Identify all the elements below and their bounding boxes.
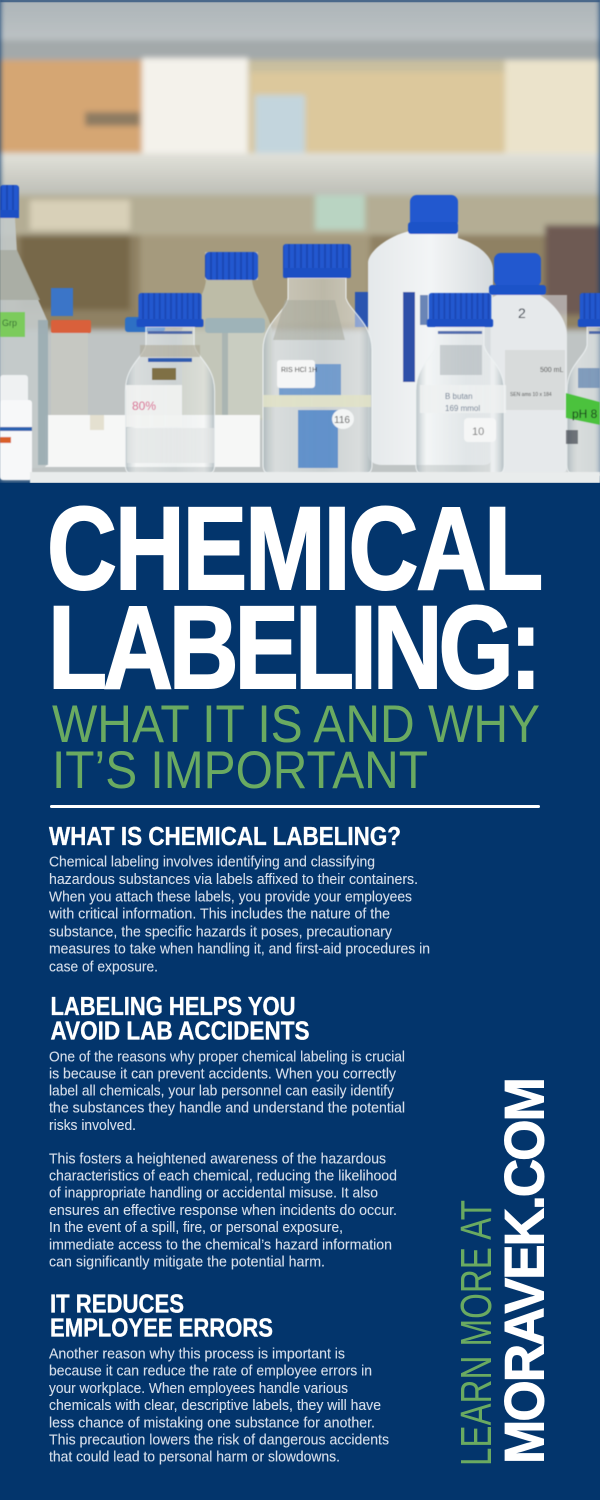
body text, second paragraph: This fosters a heightened awareness of the hazardous <box>49 1150 386 1167</box>
shelf back items <box>45 252 369 467</box>
section: what is chemical labeling <box>48 821 430 976</box>
body text, second paragraph: immediate access to the chemical’s hazard information <box>49 1236 392 1253</box>
body text <box>49 1345 389 1466</box>
title <box>47 482 541 713</box>
glass bottle, front left: 80% <box>132 399 156 413</box>
glass bottle, front right: 169 mmol <box>445 404 480 413</box>
body text: Chemical labeling involves identifying and classifying <box>49 854 375 870</box>
glass bottle, right edge <box>566 293 600 475</box>
title line: chemical: CHEMICAL <box>47 482 541 614</box>
body text, first paragraph: One of the reasons why proper chemical labeling is crucial <box>49 1048 405 1065</box>
body text: This precaution lowers the risk of dangerous accidents <box>49 1431 389 1448</box>
white plastic bottle, small: 2 <box>518 305 526 321</box>
learn more at: LEARN MORE AT <box>452 1200 501 1466</box>
body text: hazardous substances via labels affixed to their containers. <box>49 871 418 888</box>
white plastic bottle, small: 500 mL <box>540 367 563 374</box>
body text: with critical information. This includes the nature of the <box>48 906 390 923</box>
moravek.com: MORAVEK.COM <box>493 1079 556 1464</box>
divider rule <box>50 805 540 808</box>
glass bottle, centre: 116 <box>334 415 350 426</box>
body text <box>48 854 430 976</box>
body text, second paragraph: In the event of a spill, fire, or personal exposure, <box>49 1219 343 1236</box>
tall left bottle: Grp <box>2 318 17 328</box>
subtitle line two: IT’S IMPORTANT <box>52 741 428 800</box>
glass bottle, centre <box>263 244 372 475</box>
body text, second paragraph: can significantly mitigate the potential harm. <box>49 1254 325 1271</box>
heading: WHAT IS CHEMICAL LABELING? <box>49 821 401 851</box>
body text, second paragraph: ensures an effective response when incidents do occur. <box>49 1202 397 1219</box>
photo: lab bottles on a shelf <box>0 0 600 483</box>
tall left bottle <box>0 185 48 480</box>
navy band covering below the photo <box>0 483 600 1500</box>
body text: that could lead to personal harm or slowdowns. <box>49 1449 340 1466</box>
body text: less chance of mistaking one substance for another. <box>49 1414 375 1431</box>
white plastic bottle, large <box>368 195 493 465</box>
body text, first paragraph: the substances they handle and understand the potential <box>49 1100 405 1117</box>
body text, second paragraph: characteristics of each chemical, reducing the likelihood <box>49 1168 397 1185</box>
body text: measures to take when handling it, and first-aid procedures in <box>49 941 430 958</box>
body text, second paragraph <box>49 1150 397 1271</box>
heading: IT REDUCES <box>50 1289 184 1319</box>
heading <box>50 991 310 1046</box>
body text: your workplace. When employees handle various <box>49 1380 348 1397</box>
glass bottle, front right: B butan <box>445 392 473 401</box>
body text, first paragraph: label all chemicals, your lab personnel can easily identify <box>49 1082 394 1099</box>
body text, second paragraph: of inappropriate handling or accidental misuse. It also <box>49 1185 378 1202</box>
section: it reduces employee errors <box>49 1289 389 1466</box>
body text: case of exposure. <box>49 958 158 976</box>
body text, first paragraph <box>49 1048 405 1134</box>
glass bottle, front right: 10 <box>472 426 484 438</box>
body text, first paragraph: risks involved. <box>49 1117 136 1134</box>
heading: EMPLOYEE ERRORS <box>50 1313 273 1343</box>
vertical call to action <box>452 1079 556 1466</box>
body text: When you attach these labels, you provide your employees <box>49 888 412 905</box>
subtitle <box>52 695 540 800</box>
glass bottle, right edge: pH 8 <box>572 407 598 421</box>
white plastic bottle, small: SEN ams 10 x 184 <box>510 392 552 398</box>
heading: LABELING HELPS YOU <box>50 991 296 1021</box>
body text: substance, the specific hazards it poses, precautionary <box>49 923 392 940</box>
body text, first paragraph: is because it can prevent accidents. When you correctly <box>49 1065 396 1082</box>
glass bottle, front right <box>416 293 506 475</box>
subtitle line one: WHAT IT IS AND WHY <box>52 695 540 754</box>
title line: labeling: LABELING: <box>48 581 538 713</box>
table edge <box>0 0 600 483</box>
glass bottle, centre: RIS HCl 1H <box>281 367 317 374</box>
heading: AVOID LAB ACCIDENTS <box>50 1016 310 1046</box>
section: labeling helps you avoid lab accidents <box>49 991 405 1271</box>
body text: Another reason why this process is important is <box>49 1345 345 1362</box>
glass bottle, front left <box>125 293 215 475</box>
body text: because it can reduce the rate of employee errors in <box>49 1363 372 1380</box>
body text: chemicals with clear, descriptive labels, they will have <box>49 1397 381 1414</box>
blurred shelf background <box>0 0 600 480</box>
heading <box>50 1289 273 1343</box>
white plastic bottle, small <box>489 253 567 473</box>
